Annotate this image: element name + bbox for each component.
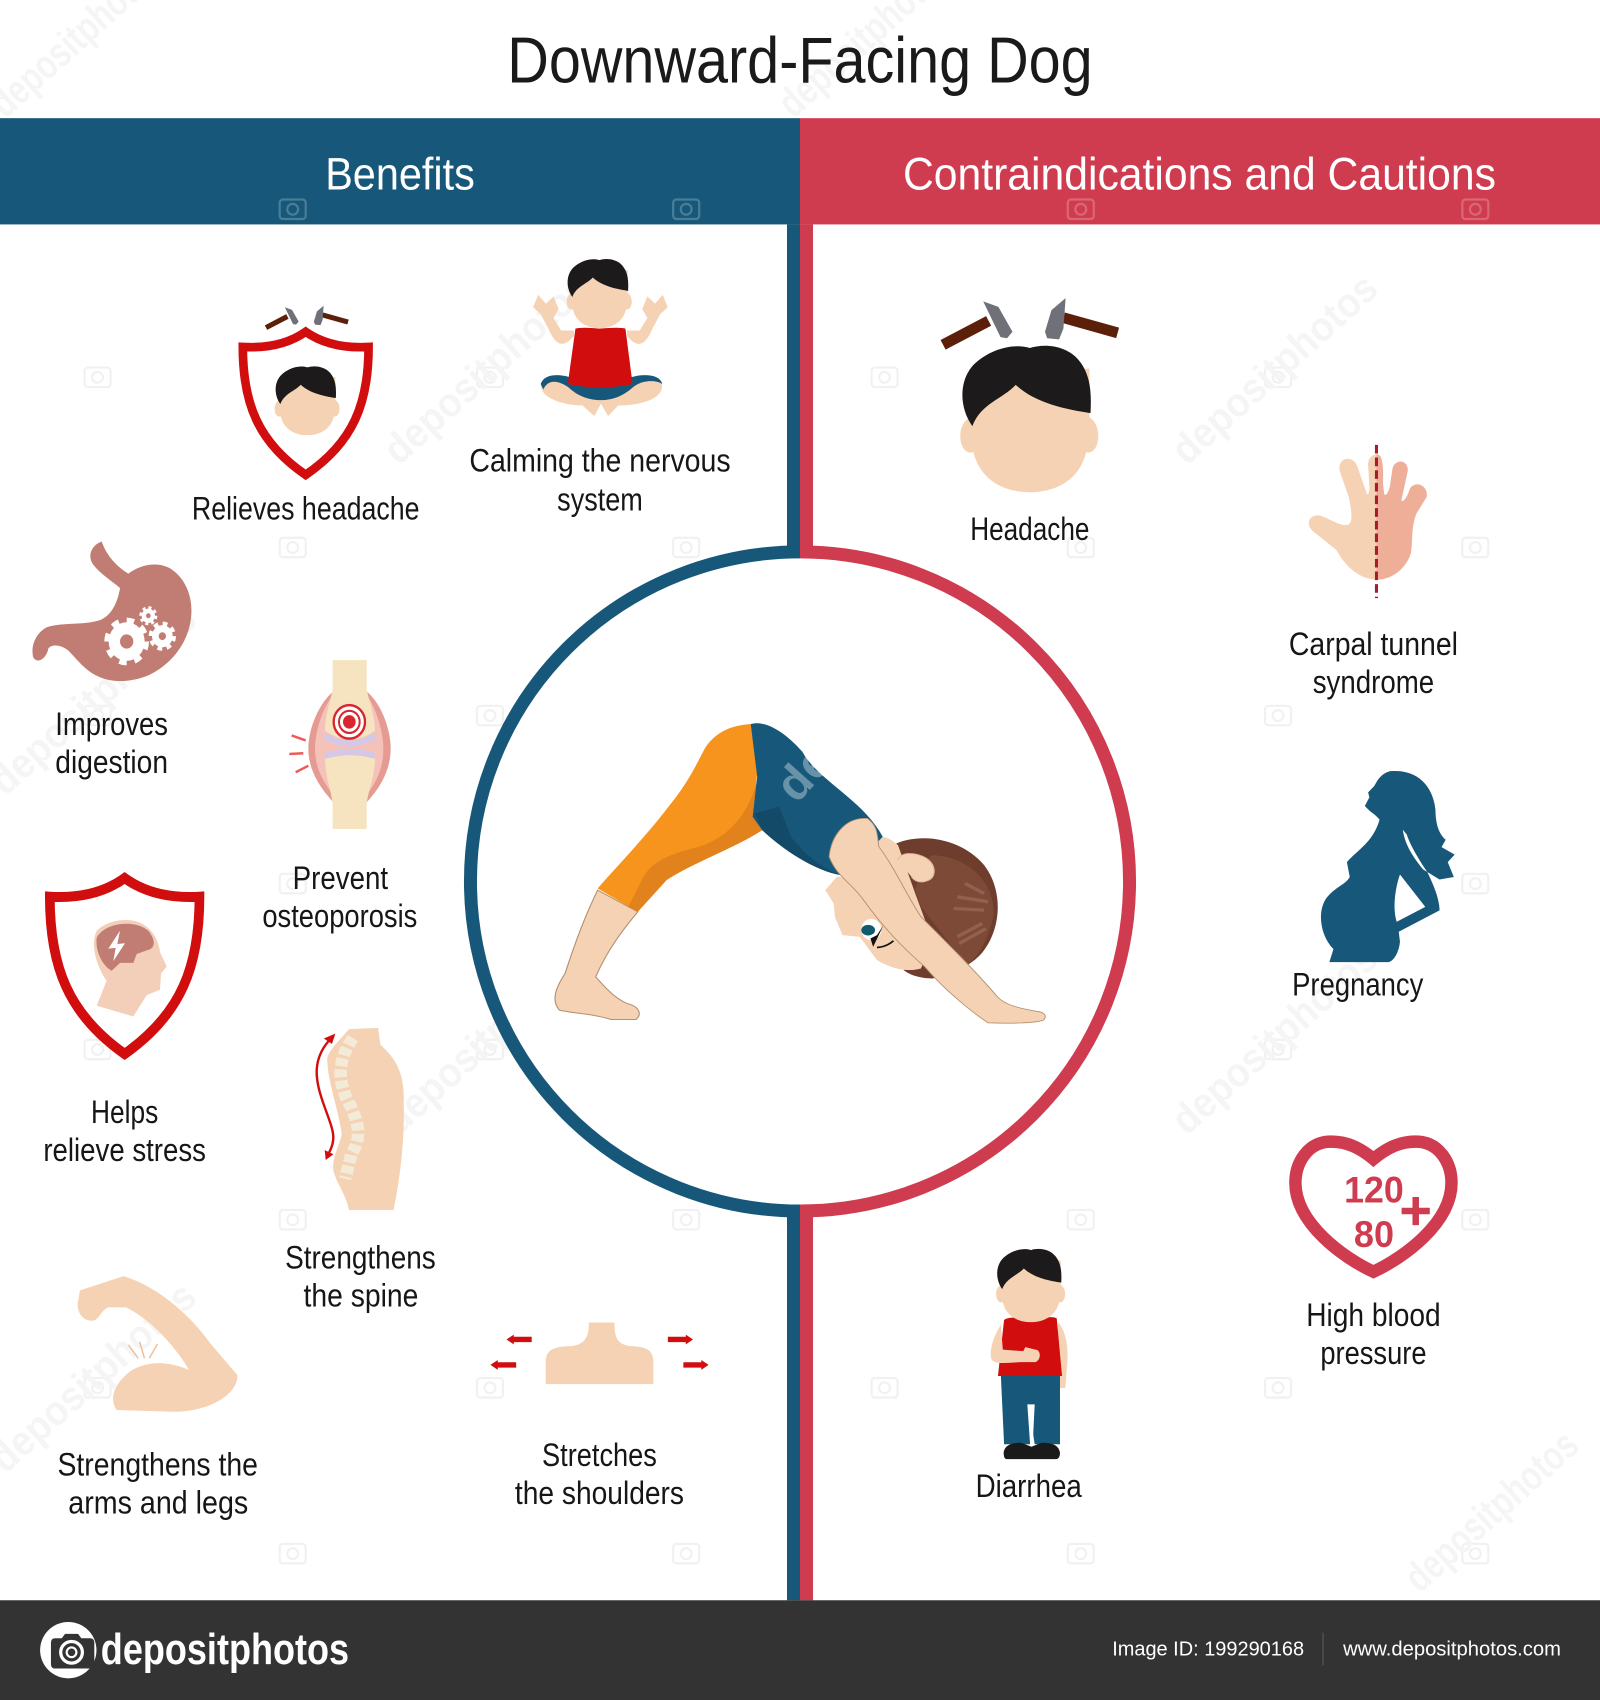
item: stretches the shoulders: the shoulders [515,1475,684,1511]
icon: head with hammers [943,298,1118,492]
item: helps relieve stress: Helps [91,1094,158,1130]
item: improves digestion [32,542,191,780]
item: improves digestion: digestion [55,744,168,780]
watermark pattern: depositphotos [374,265,598,473]
watermark pattern: depositphotos [1162,265,1386,473]
icon: heart with 120/80: 120 [1344,1169,1404,1210]
item: high blood pressure: pressure [1320,1335,1427,1371]
item: strengthens the arms and legs: arms and legs [68,1485,248,1521]
icon: torso with spine [317,1028,404,1210]
item: high blood pressure [1295,1142,1451,1371]
footer image id: Image ID: 199290168 [1112,1638,1304,1661]
item: stretches the shoulders [490,1323,709,1511]
item: diarrhea: Diarrhea [976,1468,1083,1504]
item: calming the nervous system: system [557,482,643,518]
item: prevent osteoporosis [262,660,417,934]
item: high blood pressure: High blood [1306,1297,1441,1333]
item: strengthens the spine: Strengthens [285,1239,436,1275]
title: Downward-Facing Dog [507,23,1093,96]
icon: pregnant silhouette [1321,771,1455,962]
footer logo [40,1622,349,1678]
item: relieves headache [192,306,420,526]
watermark on figure: de [766,735,842,812]
icon: shield with head and brain [50,878,199,1054]
footer logo: depositphotos [101,1626,349,1674]
illustration: downward-facing dog figure [555,723,1045,1023]
item: stretches the shoulders: Stretches [542,1437,657,1473]
icon: shoulders with arrows [490,1323,709,1384]
icon: stomach with gears [32,542,191,681]
icon: bone joint with pain target [289,660,391,829]
watermark pattern: depositphotos [374,935,598,1143]
item: prevent osteoporosis: osteoporosis [262,898,417,934]
header: benefits [0,118,800,224]
item: strengthens the spine [285,1028,436,1313]
icon: hand [1309,445,1427,598]
item: carpal tunnel syndrome: syndrome [1313,664,1434,700]
icon: heart with 120/80: 80 [1354,1214,1394,1255]
header: contraindications and cautions [800,118,1600,224]
icon: heart with 120/80 [1295,1142,1451,1272]
header: contraindications and cautions: Contraindications and Cautions [903,149,1496,200]
item: helps relieve stress [43,878,206,1168]
item: strengthens the arms and legs [57,1276,258,1521]
item: pregnancy [1292,771,1455,1002]
footer url: www.depositphotos.com [1342,1638,1561,1661]
central circle [470,552,1130,1211]
item: strengthens the arms and legs: Strengthens the [57,1447,258,1483]
item: prevent osteoporosis: Prevent [293,860,388,896]
item: headache: Headache [970,511,1089,547]
header: benefits: Benefits [325,149,475,200]
item: pregnancy: Pregnancy [1292,966,1424,1002]
item: headache [943,298,1118,547]
central divider [787,224,813,1600]
item: calming the nervous system: Calming the nervous [469,443,731,479]
item: helps relieve stress: relieve stress [43,1132,206,1168]
icon: boy holding stomach [991,1249,1068,1459]
item: improves digestion: Improves [55,706,168,742]
icon: flexed arm [78,1276,237,1412]
item: strengthens the spine: the spine [304,1277,418,1313]
icon: shield with head [243,306,369,475]
icon: meditating person [533,259,668,416]
item: carpal tunnel syndrome [1289,445,1458,700]
footer bar [0,1600,1600,1700]
item: relieves headache: Relieves headache [192,490,420,526]
item: carpal tunnel syndrome: Carpal tunnel [1289,626,1458,662]
watermark pattern: depositphotos [1162,935,1386,1143]
item: calming the nervous system [469,259,731,518]
item: diarrhea [976,1249,1083,1504]
